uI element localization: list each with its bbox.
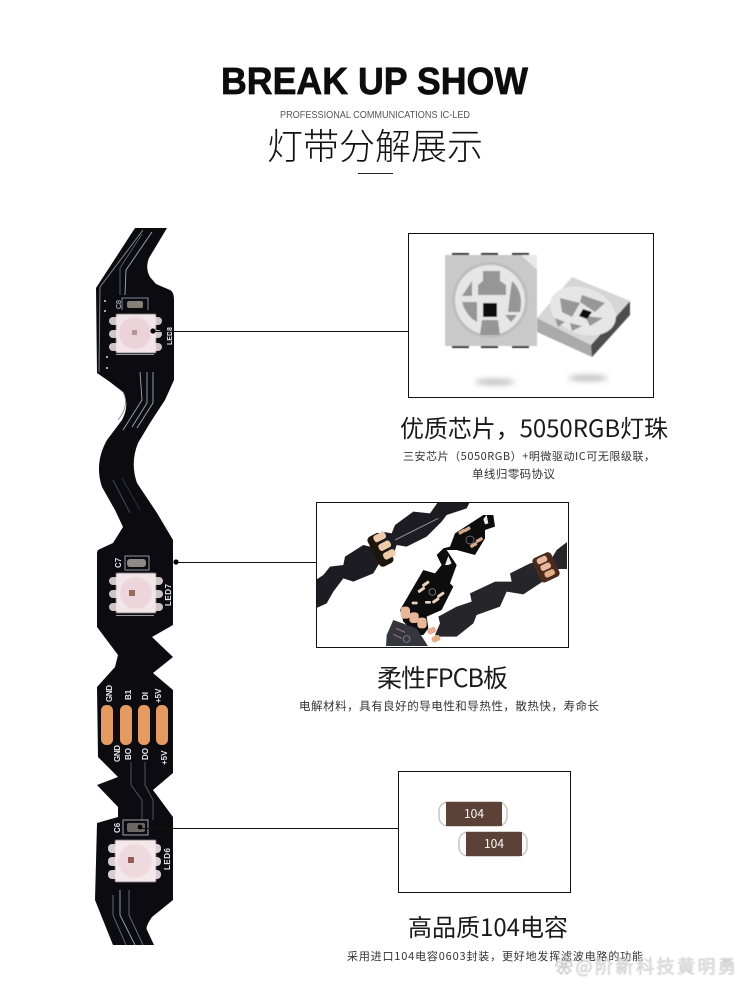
LED chip 7: [109, 573, 163, 616]
center strip pads: [401, 607, 427, 628]
label LED6: LED6: [163, 847, 172, 870]
pad labels top: B1: [124, 689, 133, 700]
capacitor bottom: 104: [484, 835, 504, 852]
front chip: [445, 253, 537, 348]
description: chip line 2: 单线归零码协议: [472, 466, 556, 482]
watermark: ❀@阶新科技黄明勇: [555, 953, 736, 979]
orange solder pads: [101, 705, 168, 745]
connector line: capacitor: [138, 825, 398, 829]
capacitor C6: [113, 820, 148, 835]
capacitor bottom: [459, 832, 527, 856]
strip A pads: [366, 531, 397, 568]
strip C: [435, 541, 568, 637]
pad labels bottom: GND: [113, 745, 122, 762]
capacitor top: 104: [464, 805, 484, 822]
subtitle: PROFESSIONAL COMMUNICATIONS IC-LED: [280, 110, 470, 121]
panel: 5050 RGB chip photo: [408, 234, 654, 398]
capacitor top: [439, 802, 507, 826]
description: chip line 1: 三安芯片（5050RGB）+明微驱动IC可无限级联，: [403, 448, 655, 464]
panel: 104 capacitor photo: [398, 772, 570, 892]
capacitor C7: C7: [114, 557, 123, 568]
pad labels top: [105, 685, 163, 703]
pad labels bottom: +5V: [160, 750, 169, 765]
description: FPCB: 电解材料，具有良好的导电性和导热性，散热快，寿命长: [299, 698, 600, 714]
pad labels top: DI: [141, 692, 150, 700]
pad labels bottom: DO: [141, 748, 150, 760]
lower chip board: [386, 620, 428, 647]
label LED7: LED7: [164, 583, 173, 606]
silkscreen dots: [104, 300, 108, 369]
connector line: chip: [150, 328, 408, 334]
title: BREAK UP SHOW: [221, 61, 528, 103]
LED chip 6: [108, 840, 161, 882]
capacitor C7: [114, 556, 149, 570]
tilted chip: [537, 277, 630, 357]
chinese heading: 灯带分解展示: [267, 118, 483, 170]
heading: FPCB: 柔性FPCB板: [377, 659, 508, 695]
LED chip 8: [109, 314, 162, 355]
heading underline: [358, 173, 393, 174]
panel: flexible FPCB photo: [316, 502, 568, 648]
center strip: [400, 515, 495, 635]
pad labels bottom: BO: [124, 748, 133, 760]
LED strip: [95, 228, 174, 945]
description: capacitor: 采用进口104电容0603封装，更好地发挥滤波电路的功能: [347, 948, 643, 964]
capacitor C8: [116, 298, 148, 310]
heading: chip: 优质芯片，5050RGB灯珠: [400, 409, 668, 444]
pad labels bottom: [113, 745, 169, 765]
capacitor C8: C8: [116, 300, 123, 309]
strip board: [95, 228, 174, 945]
connector line: board: [173, 559, 316, 565]
heading: capacitor: 高品质104电容: [408, 908, 568, 943]
copper traces: [99, 230, 153, 945]
chip shadows: [475, 375, 608, 385]
label LED8: LED8: [167, 327, 174, 345]
pad labels top: +5V: [154, 688, 163, 703]
capacitor C6: C6: [113, 822, 122, 833]
strip A: [316, 502, 470, 608]
pad labels top: GND: [105, 685, 114, 702]
